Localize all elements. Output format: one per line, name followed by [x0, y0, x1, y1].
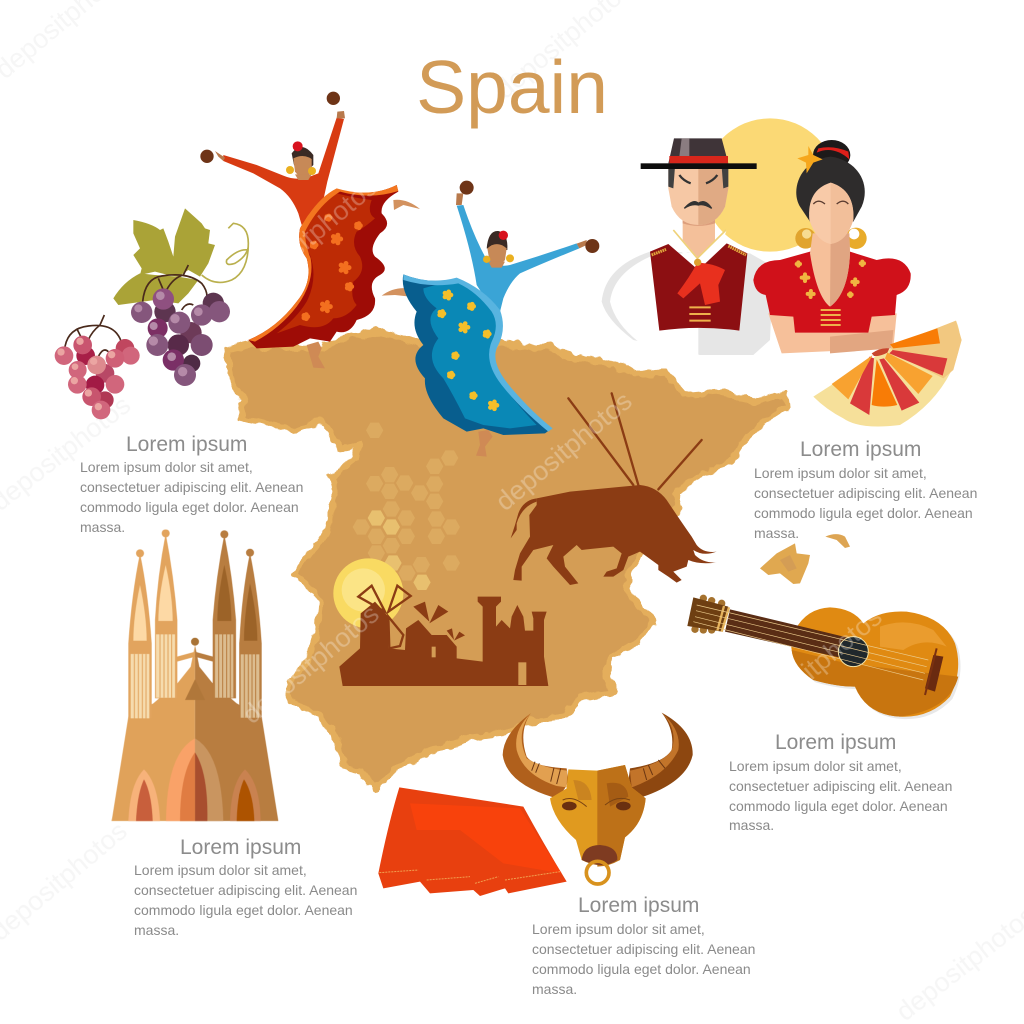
text block: people — [754, 438, 977, 541]
stems — [65, 265, 207, 357]
sound hole — [838, 637, 868, 667]
dress ornaments — [797, 262, 864, 297]
map watermarks — [235, 172, 888, 733]
map of Spain — [228, 331, 787, 790]
text block: people: Lorem ipsum dolor sit amet, — [754, 465, 927, 481]
bridge — [925, 655, 943, 692]
text block: bull: commodo ligula eget dolor. Aenean — [532, 961, 751, 977]
head — [487, 231, 507, 250]
horns — [503, 713, 568, 797]
icon: woman in flamenco dress — [753, 140, 911, 353]
text block: cathedral: massa. — [134, 922, 179, 938]
hat — [668, 138, 728, 163]
title: Spain — [416, 45, 608, 129]
icon: hand fan — [813, 321, 962, 426]
text block: guitar: consectetuer adipiscing elit. Aenean — [729, 778, 952, 794]
text block: cathedral: commodo ligula eget dolor. Aenean — [134, 902, 353, 918]
honeycomb pattern — [353, 423, 460, 590]
text block: guitar: massa. — [729, 817, 774, 833]
dress — [248, 185, 398, 348]
shirt — [602, 252, 773, 355]
neck — [725, 609, 847, 658]
text block: bull: massa. — [532, 981, 577, 997]
text block: bull — [532, 894, 755, 997]
vest — [650, 243, 747, 331]
face — [668, 167, 728, 225]
text block: grapes: Lorem ipsum dolor sit amet, — [80, 459, 253, 475]
centre spire — [191, 638, 199, 646]
neck — [683, 217, 715, 258]
headstock — [687, 597, 728, 632]
icon: windmills and castle skyline — [333, 558, 548, 686]
legs — [393, 200, 420, 210]
text block: people: consectetuer adipiscing elit. Aenean — [754, 485, 977, 501]
body — [791, 607, 958, 717]
icon: blue dancer — [382, 181, 599, 457]
text block: bull: Lorem ipsum dolor sit amet, — [532, 921, 705, 937]
dress — [753, 252, 911, 333]
text block: people: commodo ligula eget dolor. Aenean — [754, 505, 973, 521]
side arches — [128, 769, 160, 821]
pegs — [691, 595, 725, 634]
castanets — [200, 150, 214, 163]
text block: grapes: Lorem ipsum — [126, 433, 247, 456]
head — [292, 147, 313, 171]
text block: guitar: Lorem ipsum dolor sit amet, — [729, 758, 902, 774]
text block: people: massa. — [754, 525, 799, 541]
text block: bull: consectetuer adipiscing elit. Aenean — [532, 941, 755, 957]
text block: people: Lorem ipsum — [800, 438, 921, 461]
arms — [768, 313, 897, 353]
map watermarks: depositphotos — [235, 172, 383, 303]
text block: grapes: commodo ligula eget dolor. Aenean — [80, 499, 299, 515]
text block: cathedral — [134, 836, 357, 938]
map watermarks: depositphotos — [237, 599, 385, 730]
icon: guitar — [687, 595, 961, 719]
strings — [693, 605, 928, 680]
bodice and arms — [223, 118, 344, 225]
text block: grapes: massa. — [80, 519, 125, 535]
cathedral body — [112, 680, 195, 821]
legs — [382, 288, 410, 297]
icon: bull head with ring — [503, 713, 693, 884]
text block: cathedral: Lorem ipsum — [180, 836, 301, 859]
icon: red dancer — [200, 92, 420, 368]
text block: grapes — [80, 433, 303, 535]
icon: bullfighter red cape — [378, 787, 567, 896]
icon: bull silhouette with banderillas — [511, 393, 717, 585]
icon: man in flamenco costume and sun — [602, 118, 837, 355]
purple bunch — [154, 293, 224, 372]
flower — [797, 146, 823, 173]
face — [809, 183, 853, 244]
sun — [703, 118, 837, 252]
bodice and arms — [457, 205, 579, 318]
castanets — [460, 181, 474, 195]
central arch — [166, 738, 195, 821]
text block: cathedral: consectetuer adipiscing elit. Aenean — [134, 882, 357, 898]
left towers — [128, 529, 177, 718]
neck and chest — [810, 233, 850, 307]
tie — [677, 263, 725, 305]
icon: Balearic islands — [760, 534, 850, 584]
icon: Sagrada Familia cathedral — [112, 529, 278, 821]
earrings — [795, 228, 816, 249]
body shadow — [794, 610, 961, 719]
text block: cathedral: Lorem ipsum dolor sit amet, — [134, 862, 307, 878]
map watermarks: depositphotos — [490, 386, 638, 517]
tendril — [202, 223, 248, 282]
map watermarks: depositphotos — [740, 602, 888, 733]
icon: grapes and vine leaf — [55, 208, 248, 419]
pink bunch — [116, 339, 134, 358]
text block: guitar: commodo ligula eget dolor. Aenean — [729, 798, 948, 814]
head — [550, 765, 646, 865]
text block: grapes: consectetuer adipiscing elit. Aenean — [80, 479, 303, 495]
text block: bull: Lorem ipsum — [578, 894, 699, 917]
text block: guitar: Lorem ipsum — [775, 731, 896, 754]
dress — [403, 274, 552, 435]
hair — [813, 140, 850, 170]
text block: guitar — [729, 731, 952, 833]
right towers — [213, 530, 262, 718]
vine leaves — [113, 208, 215, 305]
